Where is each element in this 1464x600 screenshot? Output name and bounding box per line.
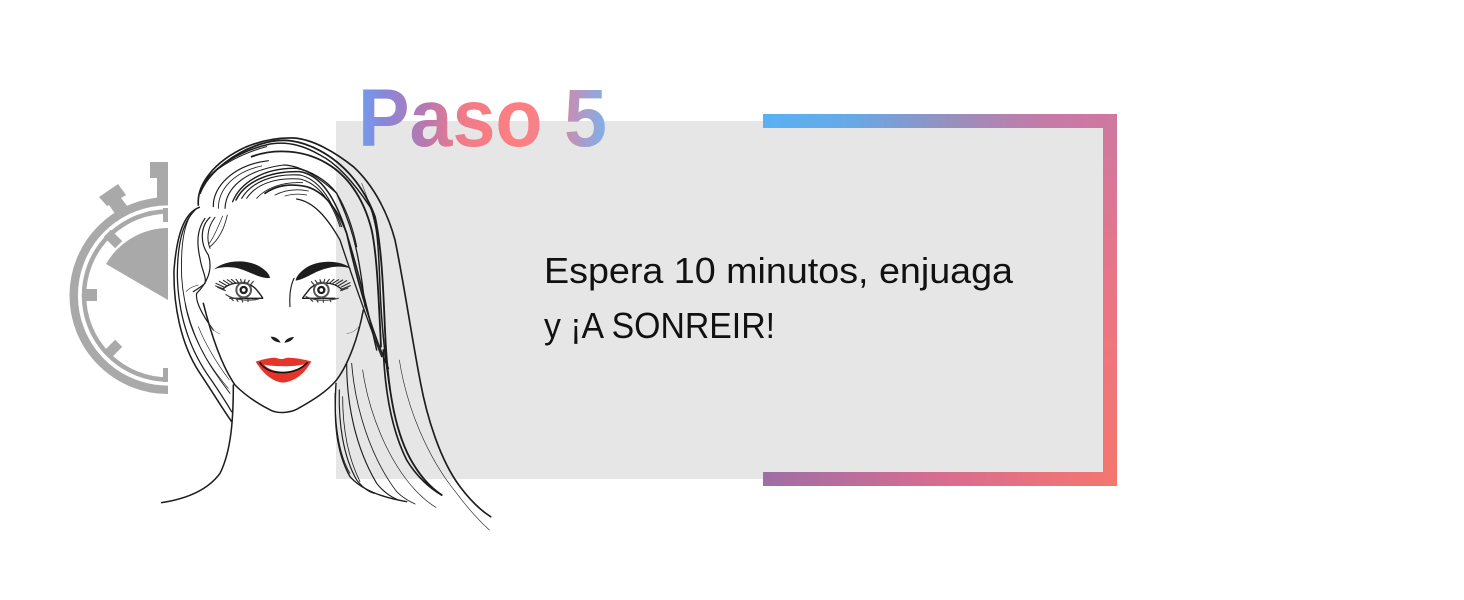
hair: lower right strands [210,325,489,530]
nose line [290,278,294,307]
stopwatch crown [150,162,168,200]
panel: grey background [336,121,1103,479]
body text [544,250,1014,346]
left eyebrow [214,261,270,278]
hair: crown strands [198,138,491,517]
right eye [303,279,350,302]
right eyebrow [296,262,351,281]
stopwatch outer ring [70,198,168,394]
title: Paso 5: Paso 5 [358,73,607,164]
lip line [260,363,307,373]
stopwatch elapsed wedge [106,228,168,300]
infographic canvas [70,90,1117,530]
stopwatch side button [99,184,128,215]
gradient frame [763,114,1117,486]
text line 2: y ¡A SONREIR! [544,305,775,346]
illustration: woman's face [162,138,491,530]
stopwatch inner ring [82,210,163,382]
face and jaw outline [203,303,363,413]
lips [256,358,311,383]
hair: left side strands [174,207,232,422]
text line 1: Espera 10 minutos, enjuaga [544,250,1014,291]
icon: half stopwatch [70,162,168,394]
neck and shoulders [162,383,407,503]
stopwatch ticks [86,208,169,382]
left eye [216,279,263,302]
teeth [264,364,304,372]
nostrils [271,337,294,343]
